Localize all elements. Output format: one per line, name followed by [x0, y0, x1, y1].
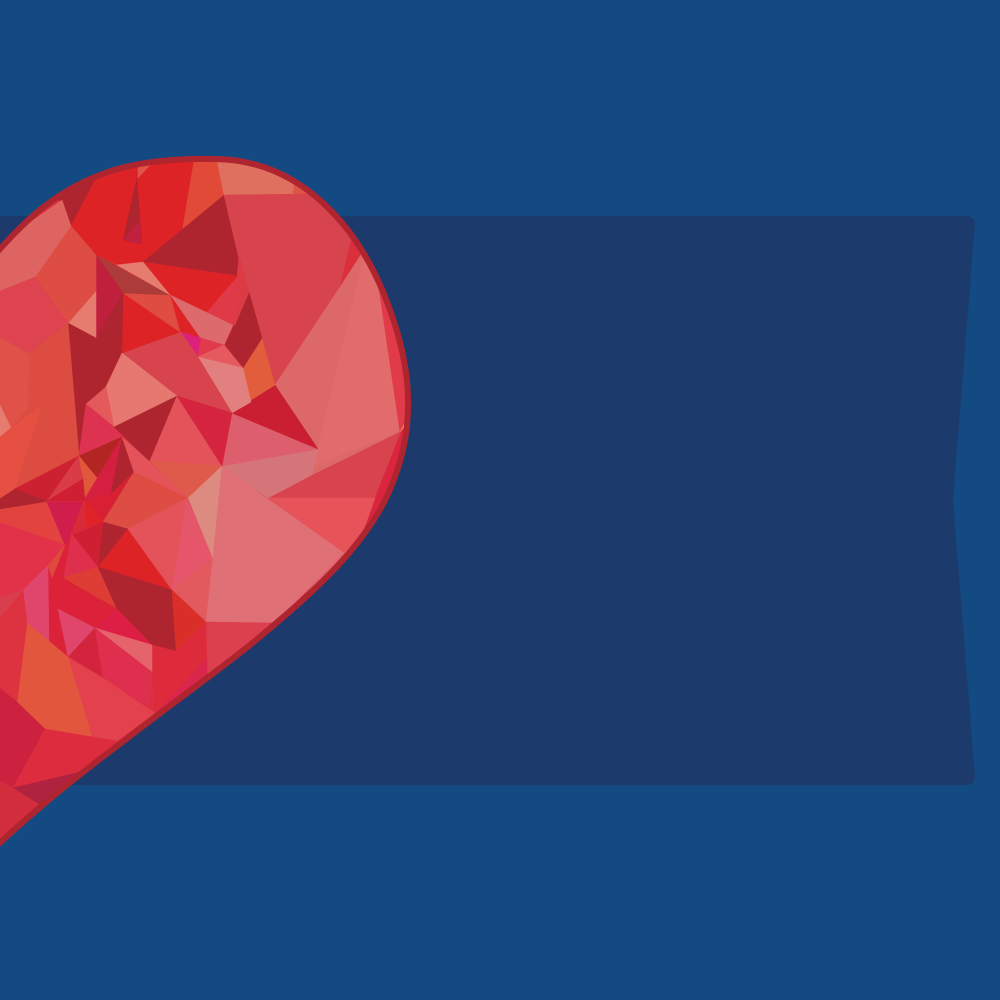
heart facets: lower section	[0, 535, 362, 850]
heart facets: middle section	[0, 293, 344, 651]
heart outline	[0, 159, 408, 850]
heart facets: upper section	[0, 155, 420, 553]
infographic canvas	[0, 156, 975, 846]
icon: low-poly heart	[0, 150, 420, 860]
panel: dark ribbon banner with notched right edge	[0, 216, 975, 785]
